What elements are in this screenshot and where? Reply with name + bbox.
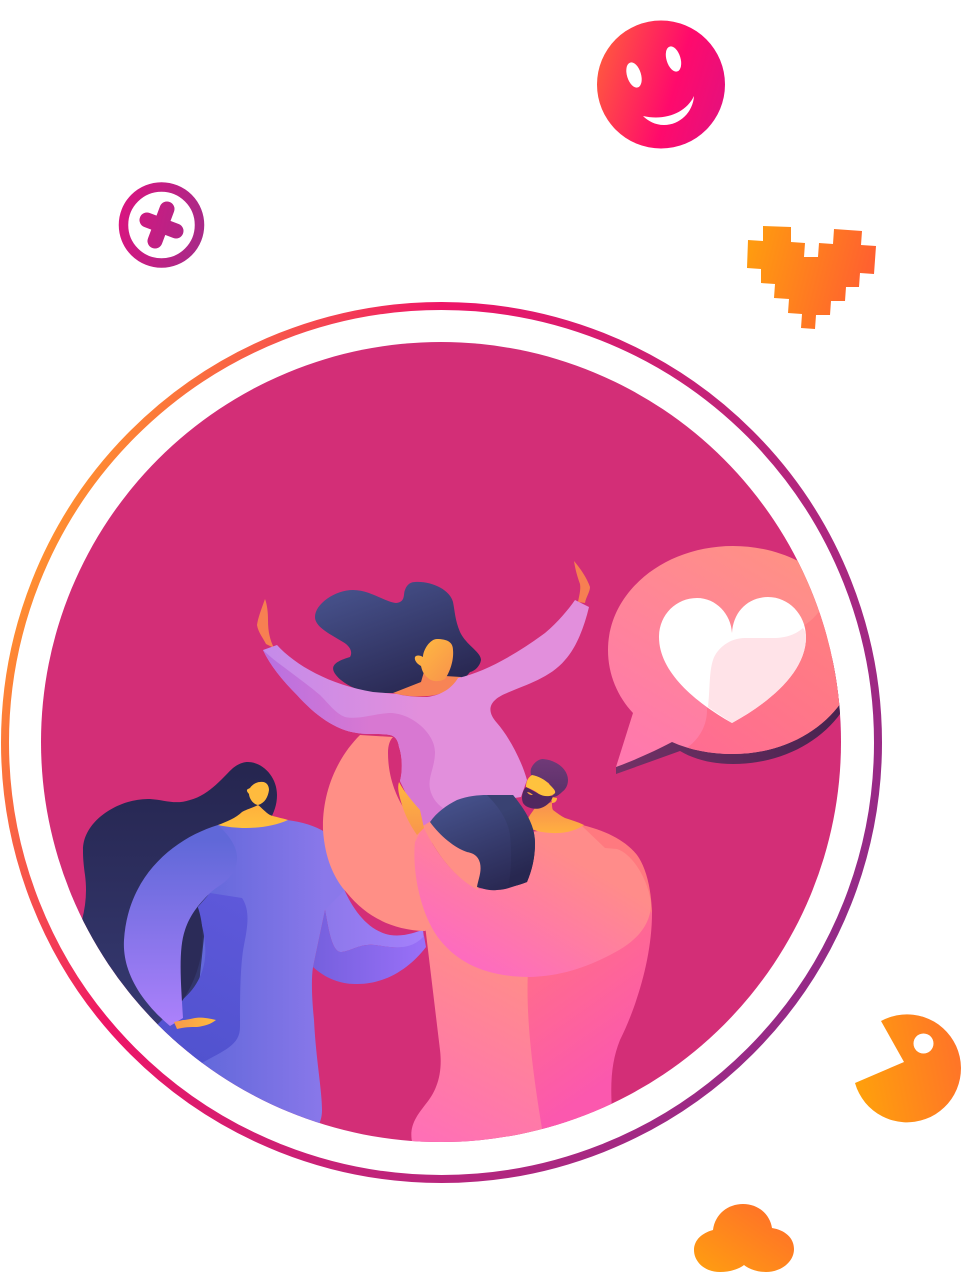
bubble shadow bbox=[616, 658, 840, 774]
girl's sweater bbox=[263, 600, 589, 826]
man's beard bbox=[522, 787, 553, 809]
woman's right arm bbox=[313, 890, 426, 984]
woman's hand bbox=[174, 1018, 216, 1029]
girl's shorts bbox=[430, 795, 535, 890]
sweater shading bbox=[263, 650, 443, 826]
man's neck bbox=[524, 802, 584, 833]
man's left leg bbox=[411, 926, 600, 1142]
woman on the left bbox=[60, 762, 426, 1130]
speech bubble bbox=[608, 546, 840, 774]
man's mouth bbox=[527, 792, 533, 795]
icon: pac-man bbox=[855, 1014, 961, 1122]
girl's neck bbox=[393, 673, 461, 696]
man's hair bbox=[531, 759, 568, 797]
woman's face bbox=[247, 782, 269, 805]
man's face bbox=[526, 775, 555, 796]
icon: pixel heart bbox=[747, 226, 876, 329]
main scene bbox=[41, 342, 870, 1146]
girl's left hand bbox=[257, 599, 274, 648]
man's right leg bbox=[528, 909, 652, 1129]
woman's neck bbox=[218, 805, 288, 828]
icon: smiley face bbox=[597, 20, 725, 148]
man's ear bbox=[551, 797, 557, 803]
girl on shoulders bbox=[257, 561, 590, 826]
man's shoulder bbox=[578, 824, 652, 913]
girl's face bbox=[415, 639, 453, 681]
outer gradient ring bbox=[5, 306, 878, 1179]
girl's thigh bbox=[423, 821, 485, 890]
icon: heart bbox=[659, 597, 806, 723]
man's arm holding the girl bbox=[414, 826, 651, 977]
girl's hair bbox=[315, 582, 481, 693]
girl's right hand bbox=[574, 561, 590, 603]
magenta background disc bbox=[41, 342, 841, 1142]
woman's body bbox=[190, 820, 345, 1130]
hair seen through the arm gap bbox=[180, 907, 202, 1002]
icon: cloud bbox=[694, 1204, 794, 1272]
girl's raised leg bbox=[323, 735, 440, 931]
woman's left arm bbox=[124, 825, 237, 1026]
bubble darker lower right bbox=[688, 612, 840, 754]
woman's inner shadow bbox=[150, 893, 248, 1064]
man's head bbox=[522, 759, 584, 833]
woman's hair bbox=[82, 762, 277, 1045]
bubble body bbox=[608, 546, 858, 767]
man's hand on the girl's leg bbox=[398, 782, 424, 835]
icon: plus in ring bbox=[124, 187, 200, 263]
man standing at centre bbox=[411, 824, 652, 1146]
